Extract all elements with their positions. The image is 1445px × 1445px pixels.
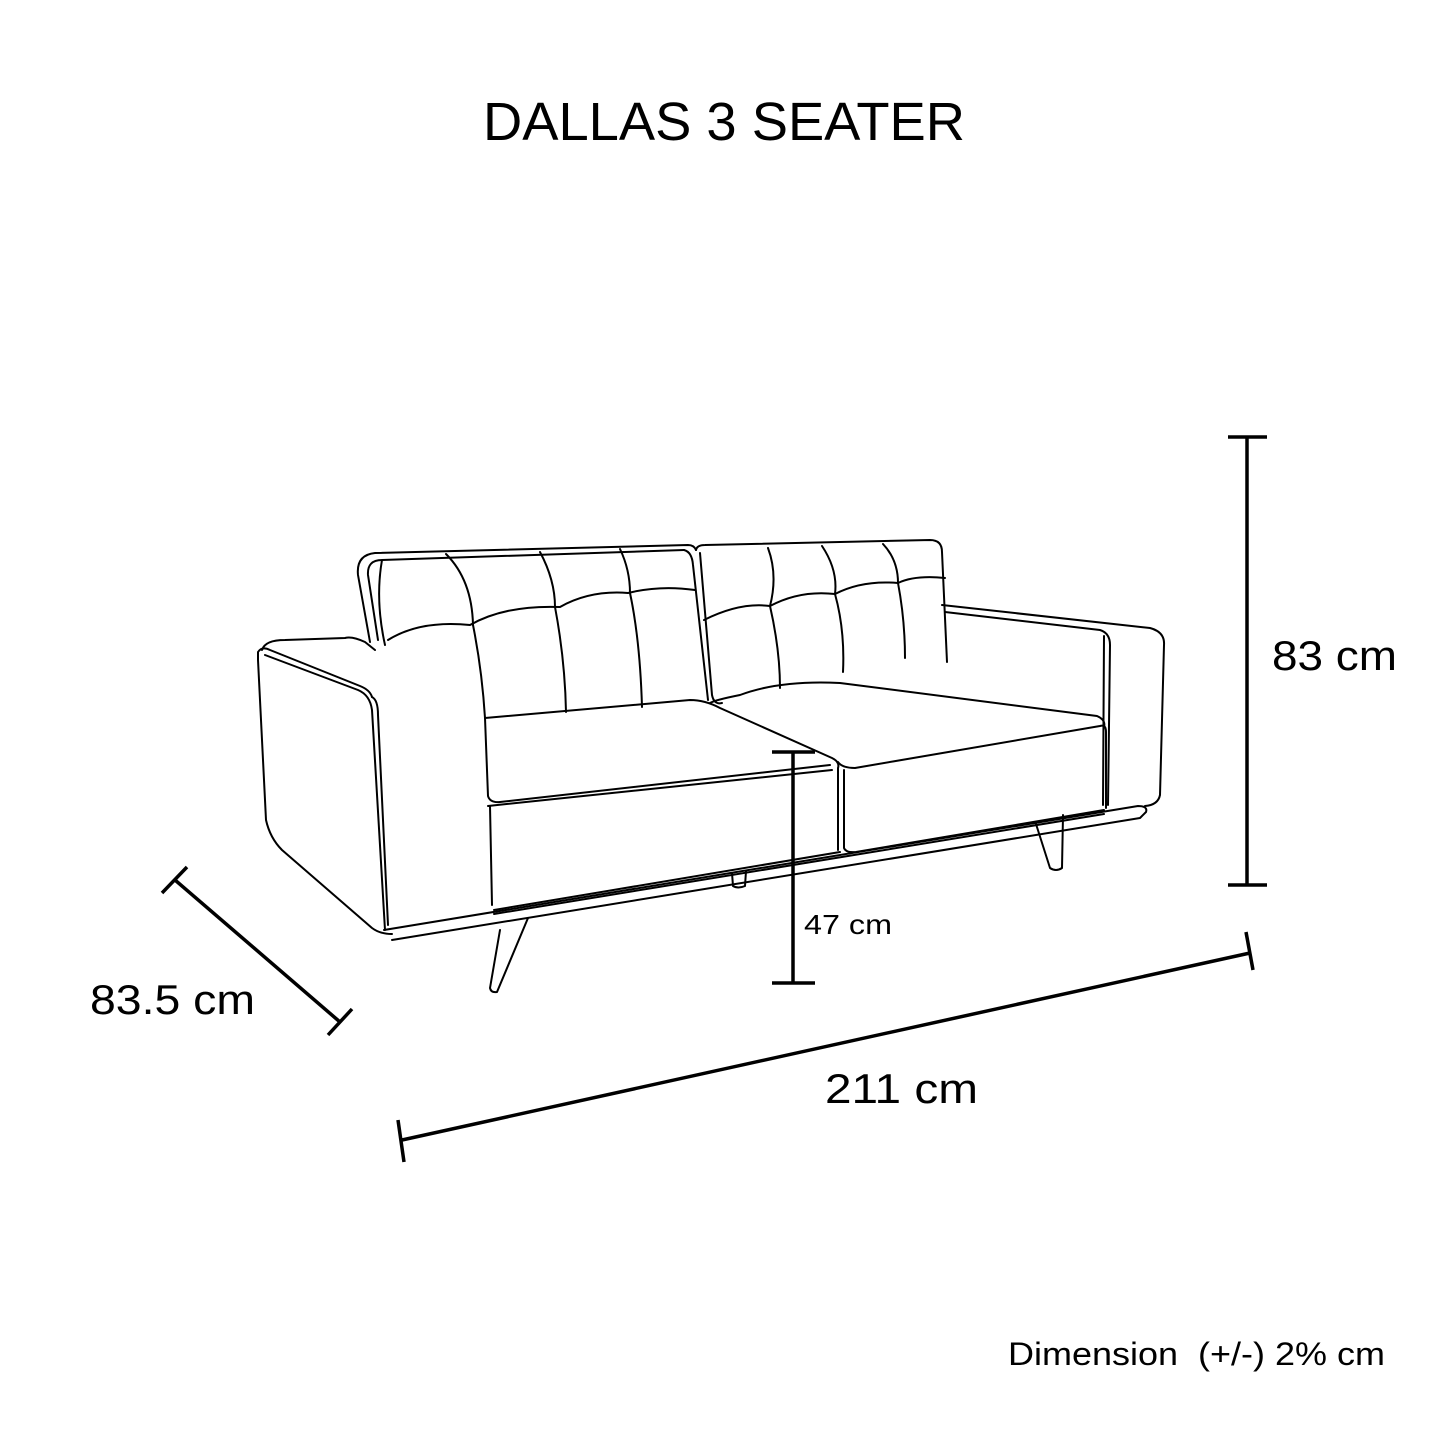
dimension: width 211 cm	[398, 932, 1253, 1162]
label: 83 cm: 83 cm	[1272, 632, 1397, 679]
label: 47 cm: 47 cm	[804, 909, 892, 940]
dimension: depth 83.5 cm	[162, 867, 352, 1035]
footer note: Dimension (+/-) 2% cm	[1008, 1336, 1385, 1372]
label: 211 cm: 211 cm	[825, 1065, 978, 1112]
title: DALLAS 3 SEATER	[483, 92, 965, 152]
dimension: seat height 47 cm	[772, 752, 815, 983]
sofa drawing	[258, 540, 1164, 992]
dimension: height 83 cm	[1228, 437, 1267, 885]
label: 83.5 cm: 83.5 cm	[90, 976, 255, 1023]
